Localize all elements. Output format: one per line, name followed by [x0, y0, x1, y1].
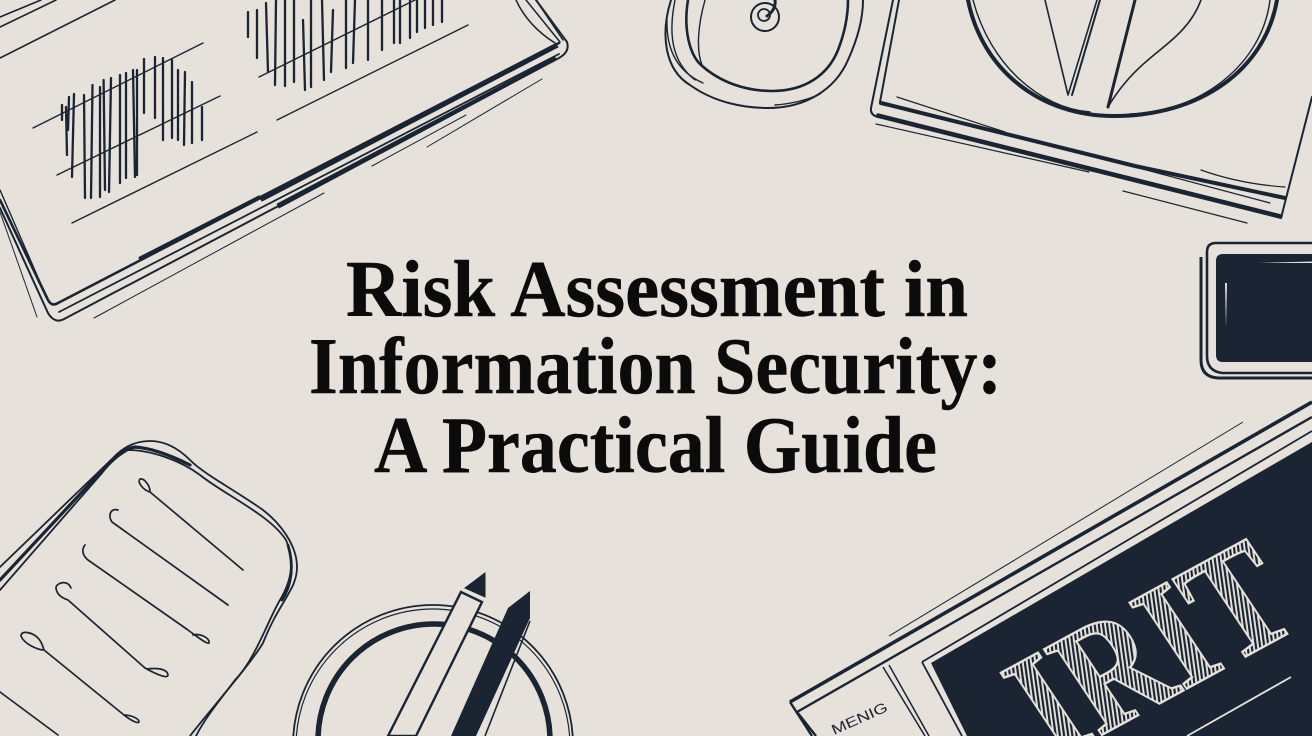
illustration: dark device right edge	[1201, 243, 1312, 378]
light pencil	[388, 573, 485, 736]
title line 2: Information Security:	[309, 323, 1002, 411]
cover rule	[1187, 677, 1291, 736]
title line 3: A Practical Guide	[374, 402, 937, 490]
note lines with looped ends	[0, 479, 243, 735]
icon: keyhole	[751, 0, 779, 31]
diagram: circle with leaf lines	[968, 0, 1277, 116]
illustration: open notebook top left	[0, 0, 568, 321]
title line 1: Risk Assessment in	[346, 246, 968, 334]
title	[309, 246, 1002, 490]
dark pencil	[451, 591, 530, 736]
book cover panel	[931, 442, 1312, 736]
chart sketch: right hatch marks	[248, 0, 442, 90]
illustration: rounded notepad bottom left	[0, 441, 297, 736]
illustration: round padlock top centre	[665, 0, 863, 108]
chart sketch: left hatch marks	[62, 57, 202, 198]
illustration: ring with two pencils bottom centre	[293, 573, 573, 736]
illustration: notebook with circle diagram top right	[871, 0, 1312, 223]
illustration: hardcover book bottom right	[790, 402, 1312, 736]
ring	[293, 605, 573, 736]
